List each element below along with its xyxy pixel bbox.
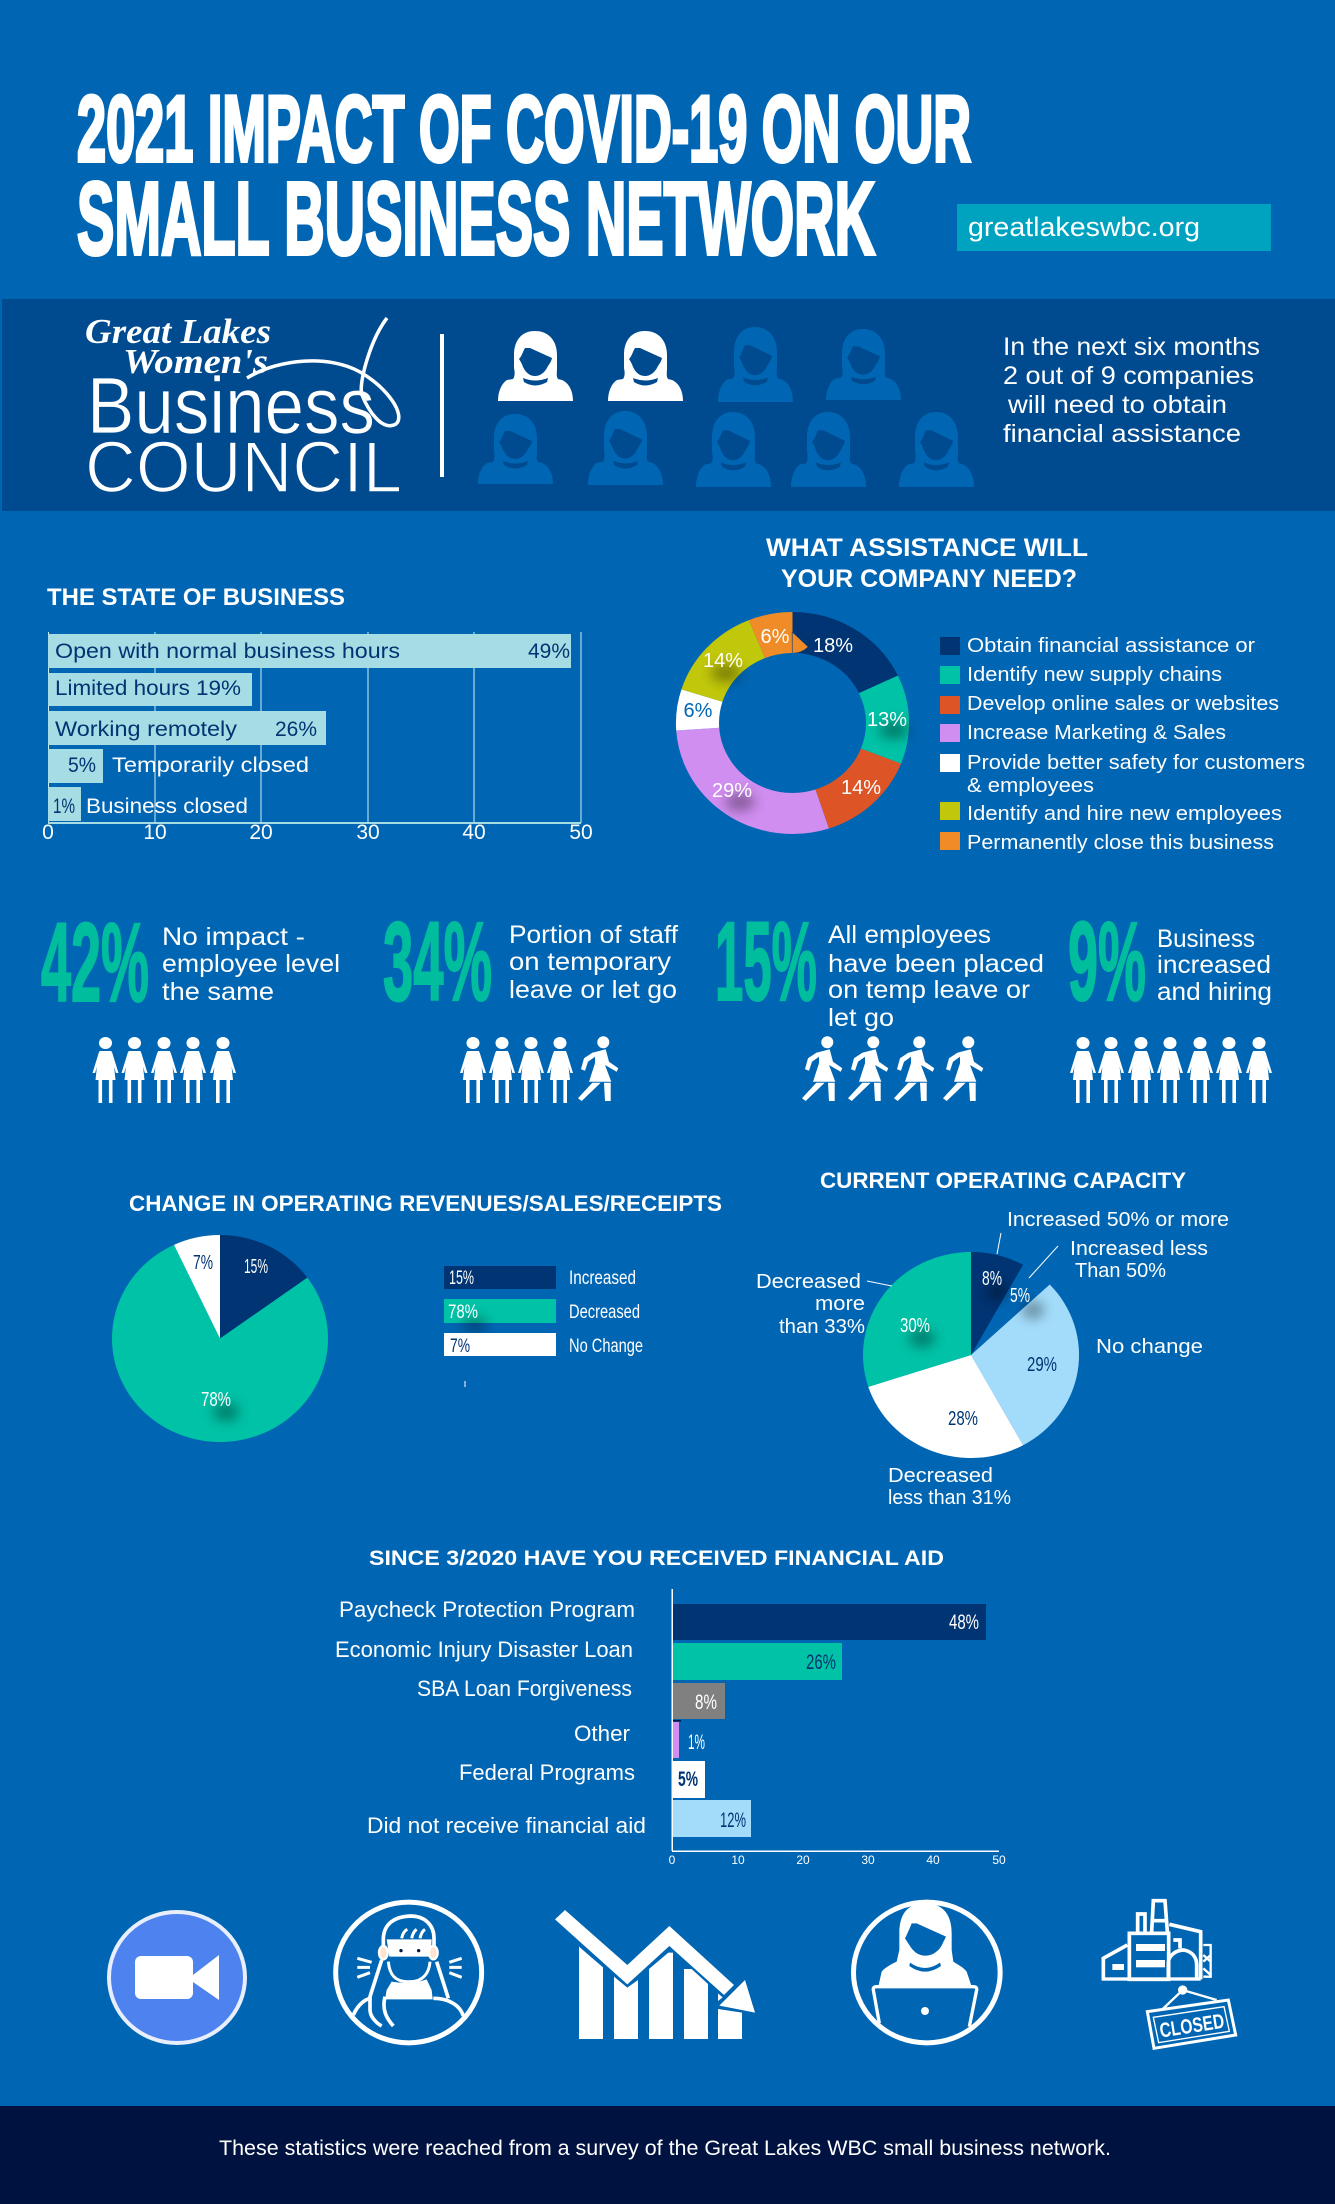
donut chart: assistance needed	[684, 626, 909, 814]
legend: revenue change: Increased	[569, 1268, 636, 1289]
bar chart: state of business: 30	[356, 821, 380, 844]
stat: 9 percent: and hiring	[1157, 978, 1272, 1006]
bar chart: financial aid: 50	[992, 1853, 1006, 1867]
footer: These statistics were reached from a survey of the Great Lakes WBC small business network.	[219, 2137, 1111, 2160]
stat: 34 percent: 34%	[383, 899, 492, 1024]
stat: 15 percent	[715, 899, 1044, 1101]
text: six month outlook: will need to obtain	[1007, 391, 1227, 419]
stat: 34 percent: Portion of staff	[509, 921, 678, 949]
callouts: operating capacity labels: Increased less	[1070, 1238, 1208, 1260]
legend: assistance needed: Identify new supply chains	[967, 664, 1222, 686]
bar chart: financial aid: 20	[796, 1853, 810, 1867]
icon: declining bar chart with arrow	[555, 1910, 755, 2039]
stat: 42 percent: 42%	[41, 900, 149, 1025]
callouts: operating capacity labels: more	[815, 1293, 865, 1315]
bar chart: state of business: 10	[143, 821, 167, 844]
pie chart: operating capacity	[863, 1252, 1079, 1458]
legend: revenue change: No Change	[569, 1336, 643, 1357]
bar chart: state of business: Business closed	[86, 795, 248, 818]
pie chart: operating capacity: 8%	[982, 1268, 1002, 1290]
bar chart: financial aid: 1%	[688, 1731, 705, 1754]
logo: COUNCIL	[85, 428, 402, 508]
stat: 42 percent	[41, 900, 340, 1103]
logo: Great Lakes	[85, 312, 271, 351]
legend: assistance needed: Identify and hire new employees	[967, 803, 1282, 825]
logo: Women's	[123, 342, 268, 381]
footer	[0, 2106, 1335, 2204]
stat: 9 percent: 9%	[1068, 899, 1146, 1024]
icon: woman wearing mask	[336, 1902, 482, 2043]
stat: 15 percent: let go	[828, 1004, 894, 1032]
icon: four standing figures and one walking	[460, 1036, 618, 1103]
bar chart: state of business: Limited hours 19%	[55, 677, 241, 700]
icon: four walking figures	[802, 1036, 983, 1101]
bar chart: financial aid: Did not receive financial aid	[367, 1813, 646, 1838]
title	[77, 76, 971, 276]
pie chart: operating capacity: 28%	[948, 1408, 978, 1430]
text: six month outlook	[1003, 333, 1260, 448]
bar chart: financial aid: 0	[669, 1853, 676, 1867]
text: six month outlook: In the next six months	[1003, 333, 1260, 361]
callouts: operating capacity labels: than 33%	[779, 1316, 865, 1338]
bar chart: financial aid: Paycheck Protection Program	[339, 1597, 635, 1622]
icon: closed sign	[1147, 1985, 1236, 2048]
bar chart: state of business: 5%	[68, 754, 96, 777]
stat: 34 percent: on temporary	[509, 948, 672, 976]
stat: 9 percent: Business	[1157, 925, 1255, 953]
bar chart: state of business: 50	[569, 821, 593, 844]
legend: revenue change: 15%	[449, 1268, 474, 1289]
donut chart: assistance needed: 14%	[841, 777, 881, 799]
bar chart: financial aid: 12%	[720, 1809, 746, 1832]
bar chart: state of business: 1%	[53, 795, 75, 818]
icon: video call	[109, 1912, 245, 2043]
callouts: operating capacity labels: less than 31%	[888, 1487, 1011, 1509]
icon: woman at laptop	[853, 1902, 1000, 2043]
bar chart: financial aid: Federal Programs	[459, 1760, 635, 1785]
legend: assistance needed: Permanently close this business	[967, 832, 1274, 854]
website badge	[957, 204, 1271, 251]
icon: closed sign: CLOSED	[1158, 2010, 1226, 2043]
stat: 34 percent	[383, 899, 678, 1103]
pie chart: operating capacity: 29%	[1027, 1354, 1057, 1376]
bar chart: financial aid: Economic Injury Disaster Loan	[335, 1637, 633, 1662]
bar chart: financial aid: 8%	[695, 1691, 717, 1714]
stat: 9 percent	[1068, 899, 1272, 1103]
legend: assistance needed: Obtain financial assistance or	[967, 635, 1255, 657]
heading: revenue change: CHANGE IN OPERATING REVENUES/SALES/RECEIPTS	[129, 1191, 722, 1216]
donut chart: assistance needed: 14%	[703, 650, 743, 672]
callouts: operating capacity labels: Decreased	[756, 1271, 861, 1293]
legend: revenue change: Decreased	[569, 1302, 640, 1323]
bar chart: financial aid: 30	[861, 1853, 875, 1867]
bar chart: state of business: 49%	[528, 640, 570, 663]
bar chart: state of business: Temporarily closed	[112, 754, 309, 777]
logo	[85, 312, 402, 508]
callouts: operating capacity labels: No change	[1096, 1336, 1203, 1358]
heading: what assistance: WHAT ASSISTANCE WILL	[766, 534, 1088, 562]
stat: 15 percent: 15%	[715, 899, 817, 1024]
bar chart: financial aid: 40	[926, 1853, 940, 1867]
stat: 9 percent: increased	[1157, 951, 1271, 979]
heading: what assistance: YOUR COMPANY NEED?	[781, 565, 1077, 593]
pie chart: operating capacity: 30%	[900, 1315, 930, 1337]
donut chart: assistance needed: 6%	[684, 700, 713, 722]
donut chart: assistance needed: 13%	[867, 709, 907, 731]
callouts: operating capacity labels: Increased 50% or more	[1007, 1209, 1229, 1231]
text: six month outlook: 2 out of 9 companies	[1003, 362, 1254, 390]
text: six month outlook: financial assistance	[1003, 420, 1241, 448]
bar chart: state of business: 0	[42, 821, 54, 844]
heading: what assistance	[766, 534, 1088, 593]
legend: assistance needed: & employees	[967, 775, 1094, 797]
heading: financial aid: SINCE 3/2020 HAVE YOU RECEIVED FINANCIAL AID	[369, 1547, 944, 1570]
bar chart: state of business: 26%	[275, 718, 317, 741]
legend: revenue change: 78%	[448, 1302, 478, 1323]
bar chart: state of business: Open with normal business hours	[55, 640, 400, 663]
bar chart: financial aid: SBA Loan Forgiveness	[417, 1676, 632, 1701]
stat: 15 percent: on temp leave or	[828, 976, 1030, 1004]
stat: 15 percent: have been placed	[828, 950, 1044, 978]
logo: Business	[87, 361, 375, 450]
pie chart: operating capacity: 5%	[1010, 1285, 1030, 1307]
bar chart: financial aid: 10	[731, 1853, 745, 1867]
donut chart: assistance needed: 29%	[712, 780, 752, 802]
bar chart: financial aid: 48%	[949, 1611, 979, 1634]
icon: five standing figures	[92, 1037, 236, 1103]
legend: assistance needed: Develop online sales or websites	[967, 693, 1279, 715]
heading: state of business: THE STATE OF BUSINESS	[47, 584, 345, 611]
legend: assistance needed	[940, 635, 1305, 854]
divider	[440, 334, 444, 477]
bar chart: financial aid	[335, 1589, 1006, 1867]
bar chart: state of business: Working remotely	[55, 718, 238, 741]
icon: nine company figures	[478, 327, 974, 487]
callouts: operating capacity labels: Decreased	[888, 1465, 993, 1487]
pie chart: revenue change: 78%	[201, 1389, 231, 1411]
heading: operating capacity: CURRENT OPERATING CAPACITY	[820, 1168, 1186, 1193]
bar chart: state of business	[42, 632, 593, 844]
stat: 42 percent: No impact -	[162, 923, 305, 951]
legend: revenue change	[444, 1266, 643, 1387]
bar chart: financial aid: 26%	[806, 1651, 836, 1674]
website badge: greatlakeswbc.org	[968, 212, 1200, 242]
stat: 42 percent: employee level	[162, 950, 340, 978]
stat: 15 percent: All employees	[828, 921, 991, 949]
bar chart: financial aid: Other	[574, 1721, 630, 1746]
bar chart: state of business: 40	[462, 821, 486, 844]
donut chart: assistance needed: 6%	[761, 626, 790, 648]
pie chart: revenue change: 7%	[193, 1252, 213, 1274]
icon: closed factory	[1102, 1901, 1236, 2048]
stat: 34 percent: leave or let go	[509, 976, 677, 1004]
icon: seven standing figures	[1070, 1037, 1272, 1103]
pie chart: revenue change	[112, 1235, 328, 1442]
donut chart: assistance needed: 18%	[813, 635, 853, 657]
bar chart: state of business: 20	[249, 821, 273, 844]
legend: assistance needed: Provide better safety for customers	[967, 752, 1305, 774]
bar chart: financial aid: 5%	[678, 1768, 698, 1791]
legend: revenue change: 7%	[450, 1336, 470, 1357]
panel: logo and assistance band	[2, 299, 1335, 511]
callouts: operating capacity labels: Than 50%	[1075, 1260, 1166, 1282]
pie chart: revenue change: 15%	[244, 1256, 268, 1278]
legend: assistance needed: Increase Marketing & Sales	[967, 722, 1226, 744]
callouts: operating capacity labels	[756, 1209, 1229, 1509]
stat: 42 percent: the same	[162, 978, 274, 1006]
